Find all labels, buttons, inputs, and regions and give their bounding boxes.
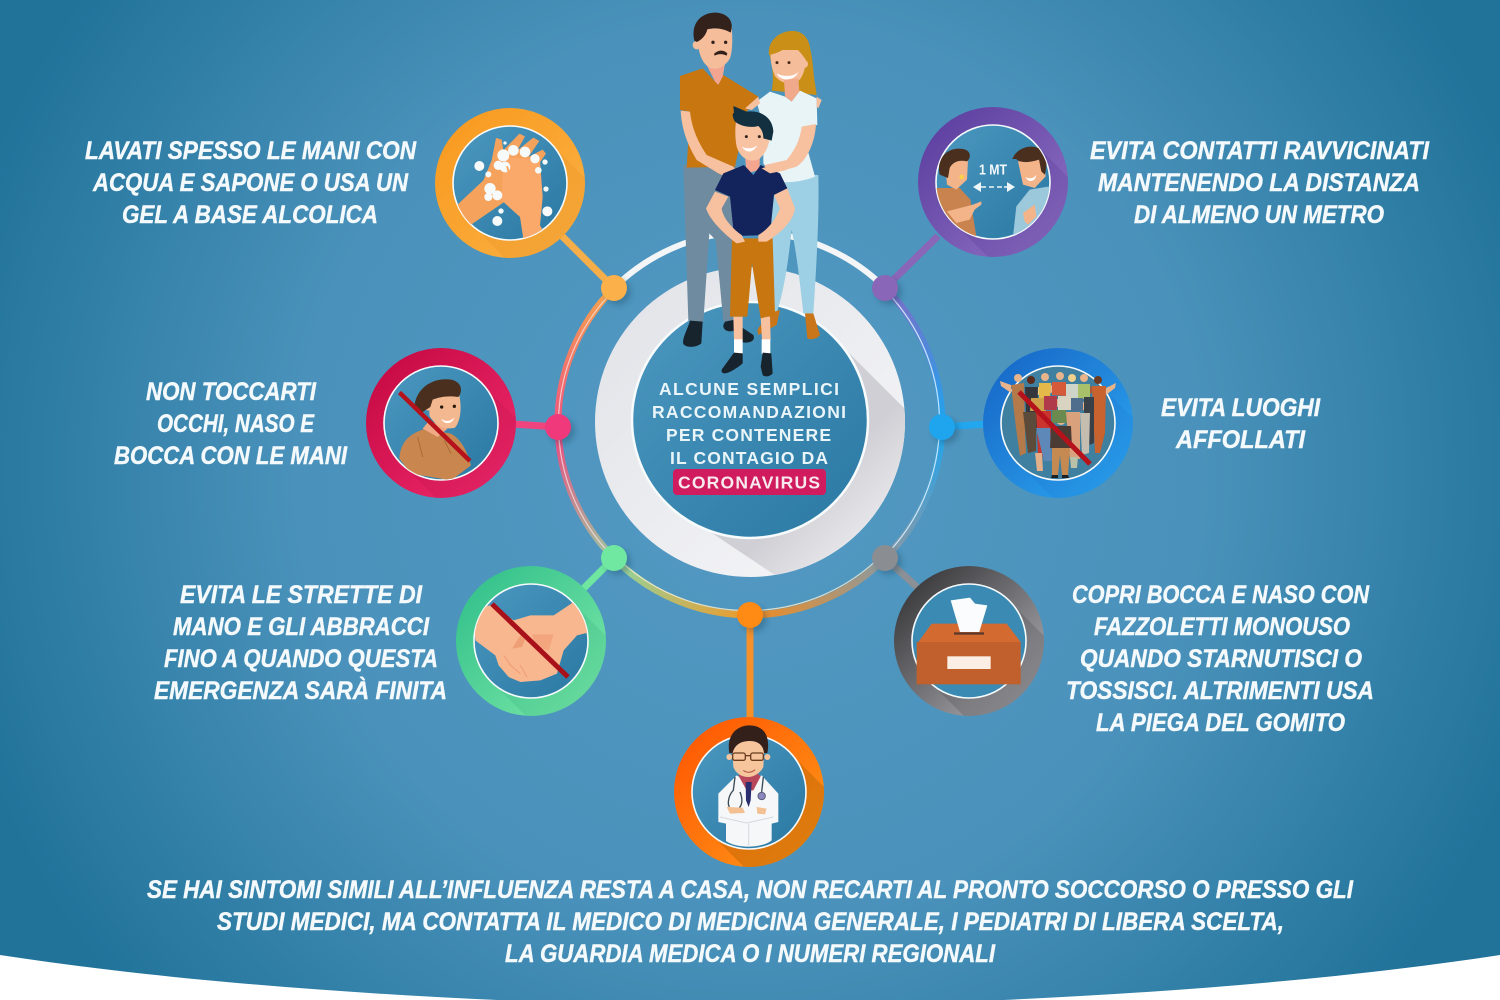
text: cover mouth (1066, 581, 1374, 737)
connector: doctor (746, 615, 754, 720)
connector: purple (885, 236, 938, 288)
text: wash hands: GEL A BASE ALCOLICA (122, 201, 378, 229)
text: avoid crowds (1161, 394, 1321, 454)
text: no handshakes: MANO E GLI ABBRACCI (173, 613, 430, 641)
text: cover mouth: QUANDO STARNUTISCI O (1080, 645, 1362, 673)
disc long shadow (712, 352, 905, 575)
central heading: ALCUNE SEMPLICI (659, 379, 839, 399)
ring nodes (545, 275, 959, 632)
connector: blue (942, 424, 986, 427)
central heading: IL CONTAGIO DA (670, 448, 828, 468)
text: wash hands: LAVATI SPESSO LE MANI CON (85, 137, 417, 165)
text: cover mouth: FAZZOLETTI MONOUSO (1094, 613, 1350, 641)
parents' hands on child (762, 163, 787, 173)
text: do not touch face: BOCCA CON LE MANI (114, 442, 348, 470)
icon: doctor (674, 717, 824, 867)
icon: avoid crowds (983, 348, 1133, 498)
central heading (652, 379, 846, 495)
text: cover mouth: LA PIEGA DEL GOMITO (1096, 709, 1345, 737)
text: do not touch face: OCCHI, NASO E (157, 410, 315, 438)
text: bottom advice (147, 876, 1354, 968)
text: cover mouth: TOSSISCI. ALTRIMENTI USA (1066, 677, 1374, 705)
text: keep distance (1090, 137, 1430, 229)
bottom white curve (0, 955, 1500, 1000)
icon: distance 1 metre (918, 107, 1068, 257)
central heading: PER CONTENERE (666, 425, 831, 445)
text: keep distance: MANTENENDO LA DISTANZA (1098, 169, 1420, 197)
icon: wash hands (435, 108, 585, 258)
text: bottom advice: SE HAI SINTOMI SIMILI ALL’INFLUENZA RESTA A CASA, NON RECARTI AL PRONTO SOCCORSO O PRESSO GLI (147, 876, 1354, 904)
text: cover mouth: COPRI BOCCA E NASO CON (1072, 581, 1370, 609)
text: wash hands (85, 137, 417, 229)
prohibition line (1019, 392, 1090, 464)
text: no handshakes: EVITA LE STRETTE DI (180, 581, 423, 609)
text: bottom advice: STUDI MEDICI, MA CONTATTA IL MEDICO DI MEDICINA GENERALE, I PEDIATRI DI LIBERA SCELTA, (217, 908, 1284, 936)
text: no handshakes (154, 581, 447, 705)
text: no handshakes: FINO A QUANDO QUESTA (164, 645, 438, 673)
text: do not touch face (114, 378, 348, 470)
child (706, 106, 795, 376)
connector: grey (885, 558, 917, 587)
prohibition line (492, 604, 568, 677)
woman (757, 31, 822, 339)
text: no handshakes: EMERGENZA SARÀ FINITA (154, 676, 447, 705)
text: do not touch face: NON TOCCARTI (146, 378, 317, 406)
connector: green (582, 558, 614, 590)
text: bottom advice: LA GUARDIA MEDICA O I NUMERI REGIONALI (505, 940, 996, 968)
family illustration (680, 13, 822, 376)
coronavirus badge: CORONAVIRUS (678, 472, 820, 492)
man (680, 13, 760, 347)
outer ring with segments (558, 232, 942, 615)
left man (936, 188, 976, 236)
prohibition line (400, 392, 470, 461)
central heading: RACCOMANDAZIONI (652, 402, 846, 422)
text: wash hands: ACQUA E SAPONE O USA UN (92, 169, 409, 197)
connector: orange (560, 234, 614, 288)
label: 1 MT: 1 MT (979, 162, 1007, 178)
text: keep distance: DI ALMENO UN METRO (1134, 201, 1384, 229)
text: avoid crowds: AFFOLLATI (1175, 426, 1306, 454)
central disc (595, 267, 905, 577)
arrow: distance (973, 182, 1015, 192)
text: avoid crowds: EVITA LUOGHI (1161, 394, 1321, 422)
icon: no handshake (456, 566, 606, 716)
right man (1013, 186, 1050, 236)
connector: pink (512, 424, 558, 427)
text: keep distance: EVITA CONTATTI RAVVICINATI (1090, 137, 1430, 165)
icon: do not touch face (366, 348, 516, 498)
icon: tissue box (894, 566, 1044, 716)
